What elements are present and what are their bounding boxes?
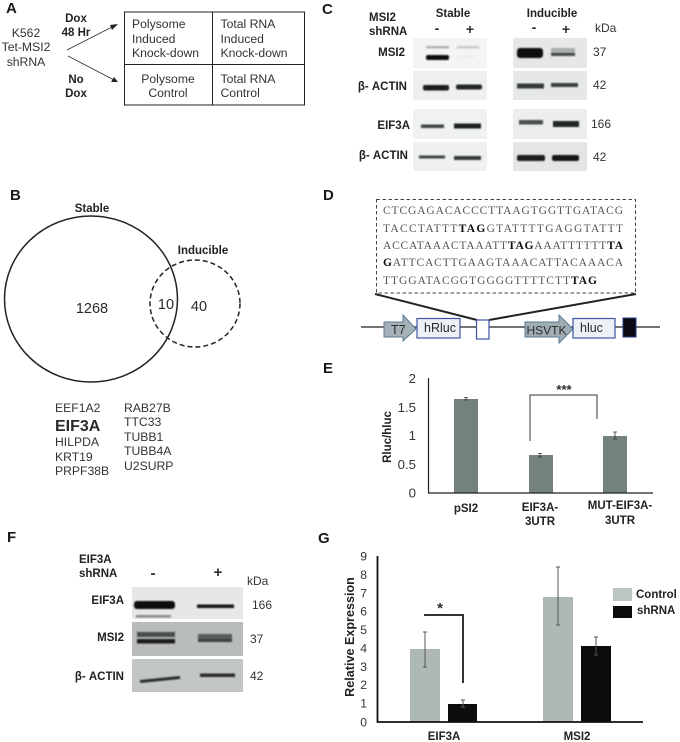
shRNA heading: shRNA bbox=[79, 568, 117, 580]
y tick labels bbox=[398, 371, 416, 500]
y axis label: Rluc/hluc bbox=[382, 411, 394, 463]
row labels: β- ACTIN bbox=[75, 671, 124, 683]
inducible heading: Inducible bbox=[527, 8, 577, 20]
shRNA heading: EIF3A bbox=[79, 554, 112, 566]
count: stable only: 1268 bbox=[76, 301, 108, 317]
row labels bbox=[75, 595, 124, 683]
shared gene list left: EIF3A bbox=[55, 418, 101, 435]
sequence text: CTCGAGACACCCTTAAGTGGTTGATACG bbox=[383, 205, 623, 217]
hluc box bbox=[573, 318, 615, 338]
stable label: Stable bbox=[75, 203, 109, 215]
panel letter D: D bbox=[323, 187, 334, 204]
lane signs: - bbox=[532, 19, 537, 35]
row labels: β- ACTIN bbox=[359, 150, 408, 162]
legend: Control bbox=[636, 589, 677, 601]
panel letter G: G bbox=[318, 530, 330, 547]
shared gene list left: EEF1A2 bbox=[55, 401, 101, 415]
backbone line bbox=[361, 326, 660, 328]
insert site box bbox=[476, 320, 489, 339]
hRluc box bbox=[417, 318, 460, 338]
panel F: western blots bbox=[7, 529, 272, 692]
significance bracket: *** bbox=[556, 382, 573, 397]
y tick labels: 0 bbox=[409, 486, 416, 500]
x labels: 3UTR bbox=[605, 515, 636, 527]
panel C: western blots bbox=[322, 1, 617, 171]
cell line label: Tet-MSI2 bbox=[2, 40, 51, 54]
lane signs: + bbox=[214, 564, 223, 581]
y tick labels bbox=[360, 550, 367, 730]
lane signs bbox=[435, 19, 570, 37]
shRNA bars bbox=[448, 646, 611, 722]
shared gene list left bbox=[55, 401, 109, 478]
panel D: reporter construct bbox=[323, 187, 660, 343]
molecular weights: 37 bbox=[250, 632, 264, 646]
row labels: EIF3A bbox=[91, 595, 124, 607]
x labels: 3UTR bbox=[525, 516, 556, 528]
condition table: Total RNA bbox=[220, 72, 276, 86]
kDa heading: kDa bbox=[247, 574, 269, 588]
y tick labels: 4 bbox=[360, 642, 367, 656]
condition table bbox=[124, 12, 304, 105]
arrow: to induced bbox=[67, 24, 118, 50]
molecular weights: 42 bbox=[593, 78, 607, 92]
condition table: Knock-down bbox=[132, 46, 199, 60]
stable circle bbox=[4, 216, 178, 382]
condition table: Knock-down bbox=[220, 46, 288, 60]
count: shared: 10 bbox=[158, 297, 174, 313]
y tick labels: 1 bbox=[360, 696, 367, 710]
molecular weights bbox=[591, 45, 611, 164]
lane signs: - bbox=[435, 20, 440, 36]
row labels: β- ACTIN bbox=[358, 81, 407, 93]
cell line label: K562 bbox=[12, 26, 40, 40]
lane signs: + bbox=[466, 21, 474, 37]
sequence callout box bbox=[376, 200, 636, 293]
panel G: bar chart bbox=[318, 530, 677, 742]
hluc box: hluc bbox=[580, 321, 603, 335]
molecular weights: 42 bbox=[593, 150, 607, 164]
molecular weights: 42 bbox=[250, 669, 264, 683]
row labels: MSI2 bbox=[378, 47, 405, 59]
shared gene list left: PRPF38B bbox=[55, 464, 109, 478]
significance bracket bbox=[424, 600, 463, 683]
blot rows bbox=[132, 587, 243, 692]
y tick labels: 1 bbox=[409, 428, 416, 443]
y tick labels: 3 bbox=[360, 660, 367, 674]
error bars bbox=[464, 398, 617, 457]
x labels: MUT-EIF3A- bbox=[588, 500, 652, 512]
legend bbox=[613, 588, 677, 618]
panel E: bar chart bbox=[323, 360, 653, 528]
molecular weights bbox=[250, 598, 272, 683]
shRNA heading: shRNA bbox=[369, 26, 407, 38]
y tick labels: 6 bbox=[360, 604, 367, 618]
T7 promoter arrow: T7 bbox=[391, 323, 406, 337]
x labels bbox=[454, 500, 652, 528]
panel letter A: A bbox=[6, 0, 17, 17]
shared gene list right: U2SURP bbox=[124, 459, 173, 473]
panel A: experimental design bbox=[2, 0, 304, 105]
row labels: MSI2 bbox=[97, 632, 124, 644]
sequence text: GATTCACTTGAAGTAAACATTACAAACA bbox=[383, 257, 624, 269]
cell line label: shRNA bbox=[7, 55, 46, 69]
axes bbox=[428, 378, 653, 493]
bars bbox=[454, 399, 627, 493]
lane signs: - bbox=[150, 565, 156, 582]
molecular weights: 37 bbox=[593, 45, 607, 59]
condition table: Induced bbox=[220, 32, 264, 46]
blot: stable lanes bbox=[413, 38, 487, 171]
x labels: EIF3A- bbox=[522, 502, 558, 514]
row labels bbox=[358, 47, 410, 162]
panel letter C: C bbox=[322, 1, 333, 18]
x labels: pSI2 bbox=[454, 503, 478, 515]
lane signs: + bbox=[562, 21, 570, 37]
y tick labels: 1.5 bbox=[398, 400, 416, 415]
panel letter E: E bbox=[323, 360, 333, 377]
condition table: Polysome bbox=[132, 17, 186, 31]
kDa heading: kDa bbox=[595, 21, 617, 35]
no dox label: No bbox=[68, 74, 84, 86]
shared gene list right: RAB27B bbox=[124, 401, 171, 415]
y tick labels: 5 bbox=[360, 623, 367, 637]
shRNA heading: MSI2 bbox=[369, 12, 396, 24]
dox label: 48 Hr bbox=[62, 27, 91, 39]
y tick labels: 2 bbox=[360, 678, 367, 692]
HSVTK promoter arrow bbox=[525, 315, 573, 343]
stable heading: Stable bbox=[436, 8, 470, 20]
error bars bbox=[423, 567, 598, 707]
shared gene list right: TTC33 bbox=[124, 415, 161, 429]
blot: inducible lanes bbox=[513, 38, 587, 171]
count: inducible only: 40 bbox=[191, 299, 207, 315]
inducible label: Inducible bbox=[178, 245, 228, 257]
y tick labels: 2 bbox=[409, 371, 416, 386]
legend: shRNA bbox=[637, 605, 675, 617]
inducible dashed circle bbox=[150, 260, 240, 347]
y tick labels: 7 bbox=[360, 586, 367, 600]
T7 promoter arrow bbox=[384, 315, 416, 341]
sequence text: ACCATAAACTAAATTTAGAAATTTTTTTA bbox=[383, 240, 624, 252]
y axis label: Relative Expression bbox=[343, 577, 357, 697]
shared gene list left: HILPDA bbox=[55, 435, 100, 449]
significance bracket: * bbox=[437, 600, 443, 617]
significance bracket bbox=[530, 382, 597, 441]
lane signs bbox=[150, 564, 223, 582]
shared gene list right bbox=[124, 401, 173, 473]
arrow: to control bbox=[68, 56, 118, 82]
sequence text: TACCTATTTTAGGTATTTTGAGGTATTT bbox=[383, 223, 623, 235]
polyA block bbox=[623, 318, 636, 337]
shared gene list right: TUBB1 bbox=[124, 430, 164, 444]
row labels: EIF3A bbox=[377, 120, 410, 132]
no dox label: Dox bbox=[65, 88, 87, 100]
condition table: Polysome bbox=[141, 72, 195, 86]
dox label: Dox bbox=[65, 13, 87, 25]
condition table: Control bbox=[220, 86, 260, 100]
y tick labels: 9 bbox=[360, 550, 367, 564]
condition table: Induced bbox=[132, 32, 175, 46]
condition table: Total RNA bbox=[220, 17, 276, 31]
callout lines bbox=[375, 294, 636, 320]
HSVTK promoter arrow: HSVTK bbox=[526, 324, 567, 338]
x labels bbox=[428, 731, 590, 742]
y tick labels: 0.5 bbox=[398, 457, 416, 472]
panel B: Venn diagram bbox=[4, 187, 240, 478]
molecular weights: 166 bbox=[252, 598, 272, 612]
sequence text bbox=[383, 205, 624, 287]
control bars bbox=[410, 597, 573, 722]
sequence text: TTGGATACGGTGGGGTTTTCTTTAG bbox=[383, 275, 597, 287]
molecular weights: 166 bbox=[591, 117, 611, 131]
shared gene list right: TUBB4A bbox=[124, 444, 172, 458]
panel letter B: B bbox=[10, 187, 21, 204]
condition table: Control bbox=[148, 86, 188, 100]
y tick labels: 8 bbox=[360, 568, 367, 582]
axes bbox=[378, 556, 643, 722]
hRluc box: hRluc bbox=[424, 321, 456, 335]
y tick labels: 0 bbox=[360, 716, 367, 730]
shared gene list left: KRT19 bbox=[55, 450, 93, 464]
panel letter F: F bbox=[7, 529, 16, 546]
